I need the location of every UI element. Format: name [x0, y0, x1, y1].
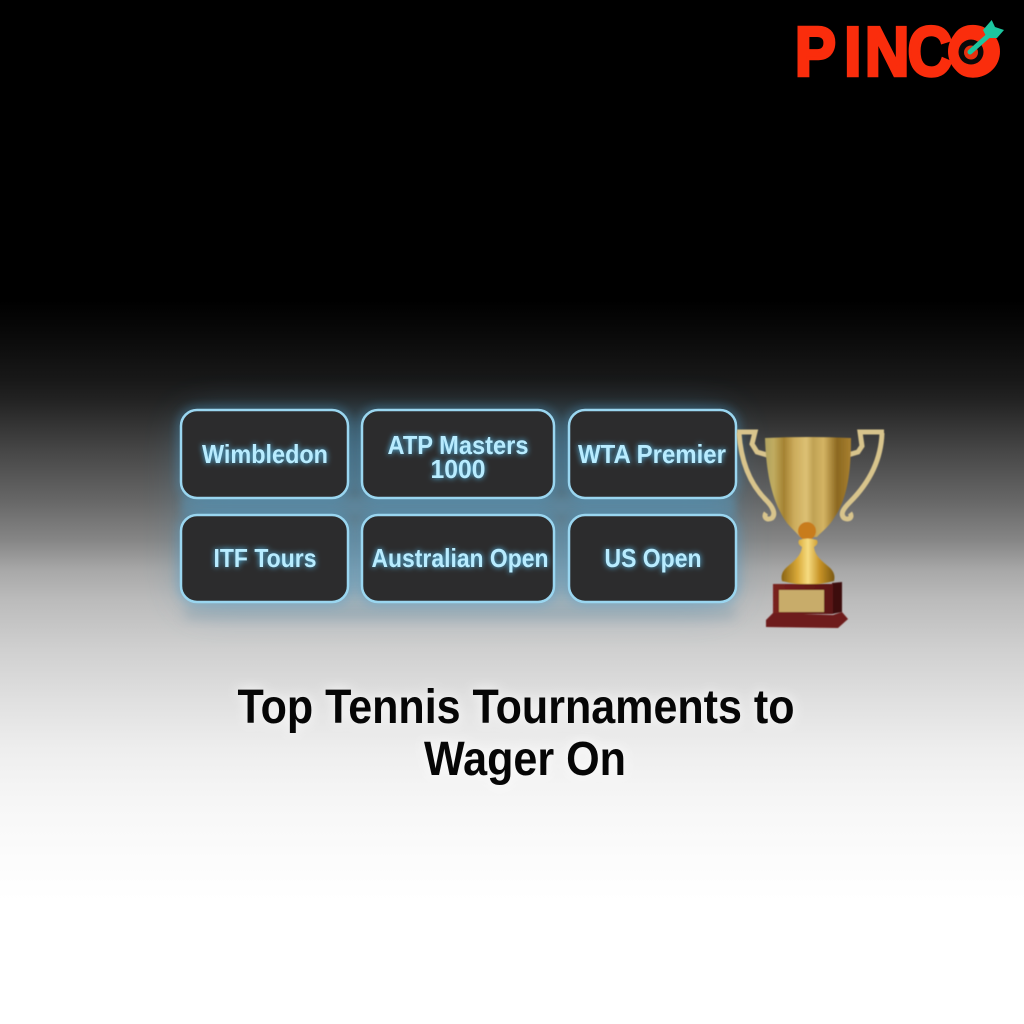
title: Wager On [424, 733, 626, 786]
panel: Wimbledon: Wimbledon [202, 439, 328, 469]
panel: ATP Masters 1000: 1000 [430, 454, 486, 484]
panel: Australian Open: Australian Open [372, 543, 548, 573]
panel: WTA Premier [569, 410, 736, 498]
panel: Wimbledon: Wimbledon [202, 439, 328, 469]
panel: ITF Tours: ITF Tours [214, 543, 316, 573]
panel: ATP Masters 1000: 1000 [430, 454, 486, 484]
panel: WTA Premier: WTA Premier [578, 439, 726, 469]
panel: ATP Masters 1000: ATP Masters [388, 430, 528, 460]
cup knob [798, 522, 816, 540]
blue glow behind panels [185, 415, 730, 605]
logo: PINCO: PINCO [795, 12, 997, 90]
panel: ITF Tours: ITF Tours [214, 543, 316, 573]
blue glow between panel rows [181, 498, 736, 515]
title: Top Tennis Tournaments to [238, 681, 794, 734]
base plinth [766, 612, 848, 628]
icon: gold trophy [737, 432, 884, 628]
panel: Wimbledon [181, 410, 348, 498]
icon: target and dart [948, 20, 1004, 78]
panel: US Open: US Open [604, 543, 702, 573]
panel: US Open [569, 515, 736, 602]
panel: Australian Open: Australian Open [372, 543, 548, 573]
floor shadow under panels [185, 608, 735, 618]
panel: ATP Masters 1000: ATP Masters [388, 430, 528, 460]
panel: ATP Masters 1000 [362, 410, 554, 498]
wooden base front [773, 584, 833, 614]
panel: WTA Premier: WTA Premier [578, 439, 726, 469]
title [238, 681, 794, 786]
panel: US Open: US Open [604, 543, 702, 573]
panel: ITF Tours [181, 515, 348, 602]
panel: Australian Open [362, 515, 554, 602]
right handle [842, 432, 884, 519]
title: Top Tennis Tournaments to [238, 681, 794, 734]
left handle [737, 432, 774, 519]
brass plate [779, 590, 824, 612]
title: Wager On [424, 733, 626, 786]
cup bowl [765, 437, 851, 537]
stem and foot [782, 538, 834, 584]
wooden base side [832, 582, 842, 614]
